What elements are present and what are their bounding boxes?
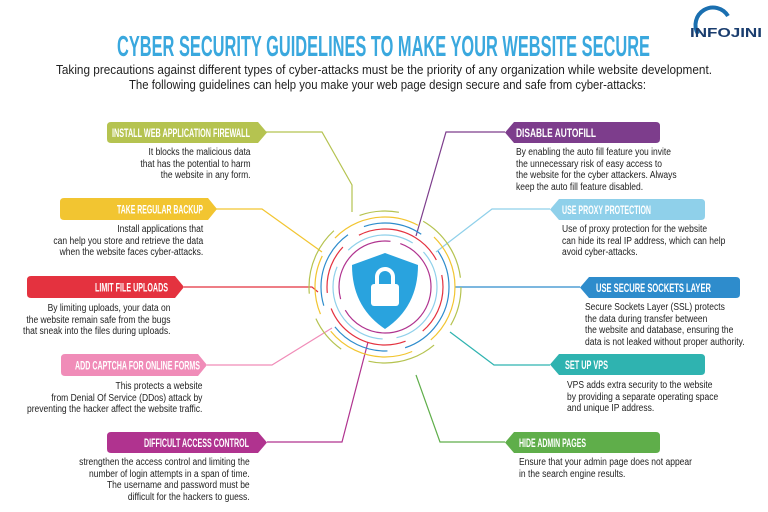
panel: ssl: Secure Sockets Layer (SSL) protects — [585, 302, 725, 313]
panel: backup: Install applications that — [117, 224, 203, 235]
panel: limit uploads: By limiting uploads, your data on — [47, 303, 170, 314]
panel: ssl: the data during transfer between — [585, 314, 707, 325]
panel: ssl — [580, 277, 745, 348]
panel: autofill: the website for the cyber attackers. Always — [516, 170, 677, 181]
panel: autofill: By enabling the auto fill feature you invite — [516, 147, 671, 158]
panel: difficult access: difficult for the hackers to guess. — [128, 492, 250, 503]
panel: backup: when the website faces cyber-attacks. — [59, 247, 203, 258]
panel: difficult access — [79, 432, 267, 503]
panel: autofill: keep the auto fill feature disabled. — [516, 182, 643, 193]
panel: hide admin: HIDE ADMIN PAGES — [519, 436, 586, 450]
panel: captcha — [27, 354, 207, 415]
panel: backup: can help you store and retrieve the data — [53, 236, 203, 247]
panel: firewall: the website in any form. — [161, 170, 251, 181]
panel: hide admin: in the search engine results. — [519, 469, 625, 480]
panel: firewall: It blocks the malicious data — [149, 147, 251, 158]
panel: hide admin: Ensure that your admin page does not appear — [519, 457, 692, 468]
panel: vps: VPS adds extra security to the website — [567, 380, 713, 391]
panel: captcha: preventing the hacker affect the website traffic. — [27, 404, 202, 415]
panel: limit uploads — [23, 276, 184, 337]
panel: proxy: can hide its real IP address, which can help — [562, 236, 725, 247]
logo: INFOJINI — [690, 25, 762, 40]
panel: firewall — [107, 122, 267, 181]
panel: proxy — [550, 199, 725, 258]
panel: autofill — [505, 122, 677, 193]
panel: captcha: This protects a website — [115, 381, 202, 392]
panel: autofill: the unnecessary risk of easy access to — [516, 159, 662, 170]
subtitle: Taking precautions against different types of cyber-attacks must be the priority of any organization while website development. — [56, 63, 712, 77]
panel: hide admin — [505, 432, 692, 480]
panel: proxy: Use of proxy protection for the website — [562, 224, 707, 235]
panel: limit uploads: the website remain safe from the bugs — [26, 315, 170, 326]
panel: difficult access: The username and password must be — [107, 480, 250, 491]
panel: proxy: avoid cyber-attacks. — [562, 247, 638, 258]
panel: firewall: that has the potential to harm — [141, 159, 251, 170]
panel: vps: SET UP VPS — [565, 358, 608, 372]
panel: difficult access: strengthen the access control and limiting the — [79, 457, 250, 468]
panel: vps — [550, 354, 718, 414]
panel: autofill: DISABLE AUTOFILL — [516, 126, 596, 140]
icon: shield lock — [352, 253, 418, 329]
logo — [690, 6, 762, 40]
subtitle: The following guidelines can help you make your web page design secure and safe from cyber-attacks: — [129, 78, 646, 92]
panel: backup — [53, 198, 216, 258]
panel: limit uploads: that sneak into the files during uploads. — [23, 326, 170, 337]
panel: ssl: data is not leaked without proper authority. — [585, 337, 745, 348]
panel: difficult access: number of login attempts in a span of time. — [89, 469, 250, 480]
panel: captcha: from Denial Of Service (DDos) attack by — [51, 393, 202, 404]
subtitle — [56, 63, 712, 92]
panel: vps: and unique IP address. — [567, 403, 654, 414]
panel: ssl: the website and database, ensuring the — [585, 325, 733, 336]
panel: vps: by providing a separate operating space — [567, 392, 718, 403]
